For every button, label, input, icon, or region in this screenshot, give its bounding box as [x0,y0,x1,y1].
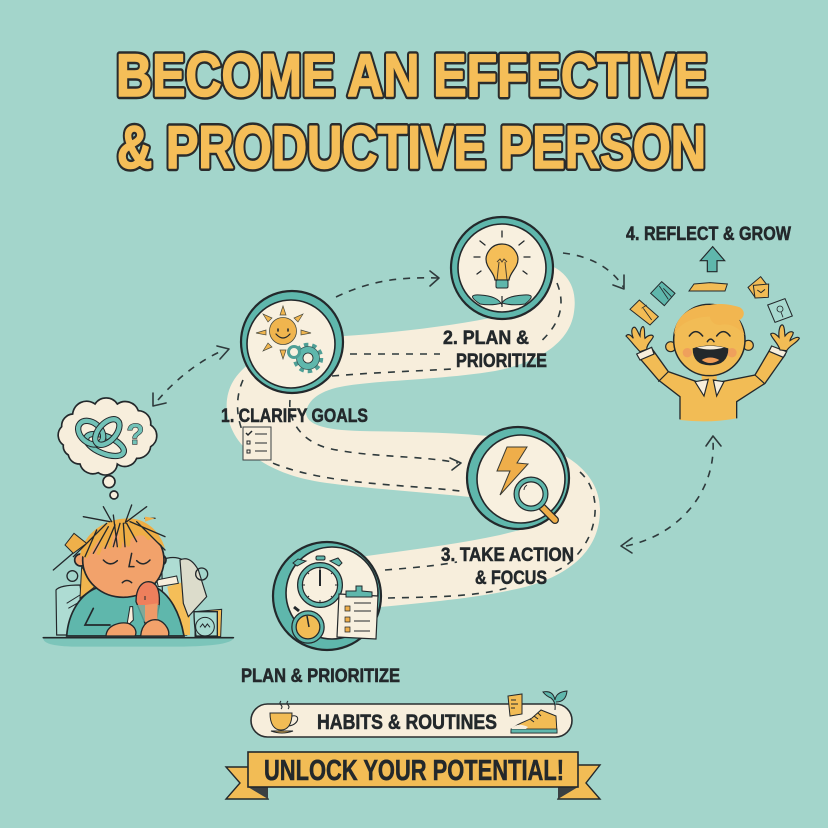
title: BECOME AN EFFECTIVE [116,42,708,109]
step 1 circle: clarify goals [241,291,343,393]
icon: tangled knot [74,415,127,461]
winding path ribbon [227,262,600,608]
icon: up arrow [700,247,725,272]
cuffs [637,346,787,360]
icon: checklist [243,427,271,460]
icon: yellow box [630,300,658,325]
head [83,523,164,597]
icon: teal note [651,282,675,306]
label: step 4: 4. REFLECT & GROW [626,224,791,245]
icon: sprout leaves [472,295,531,307]
icon: lightning bolt [497,447,528,495]
collar [695,379,724,396]
cheeks [683,348,692,357]
title [116,42,708,181]
banner main band [248,752,578,787]
happy person [626,247,799,421]
step 3 circle: take action and focus [467,427,569,529]
habits and routines pill [251,691,572,737]
label: step 1: 1. CLARIFY GOALS [221,405,368,427]
label: plan and prioritize: PLAN & PRIORITIZE [241,666,400,687]
step 2 circle: plan and prioritize [451,217,553,319]
hair back [80,567,95,598]
icon: clipboard [337,586,378,639]
banner left tail [226,767,268,799]
label: step 2 [443,327,547,372]
hair [53,505,165,570]
clutter behind person [56,557,208,635]
label: step 2: PRIORITIZE [456,350,547,372]
pen [127,607,133,627]
banner: unlock your potential [226,752,600,799]
torso and arms [67,587,184,636]
desk shadow [43,638,233,647]
arrow: step 2 to step 4 [563,253,624,289]
title: & PRODUCTIVE PERSON [117,114,706,181]
icon: sun [256,306,311,359]
hair [674,304,744,335]
banner right tail [558,765,600,799]
dashed route lines on ribbon [238,283,595,598]
desk line [43,635,233,640]
title: & PRODUCTIVE PERSON [117,114,706,181]
left hand [626,327,653,352]
banner folds [248,787,578,799]
arrow: confusion to step 1 [153,346,229,406]
arrow: clarify goals into step 3 [450,458,461,470]
label: step 3: & FOCUS [475,567,547,589]
label: habits and routines: HABITS & ROUTINES [317,711,497,734]
arrow: step 4 to step 3 [621,436,721,553]
eyes and nose [689,332,730,342]
icon: note [508,694,522,716]
sweater fold lines [658,372,765,384]
face details [103,553,150,583]
right hand [771,325,799,351]
banner text: UNLOCK YOUR POTENTIAL! [264,755,564,787]
tired person at desk [43,505,233,647]
title: BECOME AN EFFECTIVE [116,42,708,109]
icon: gears [288,346,320,370]
neck [702,373,717,387]
hands [106,620,169,636]
mug [194,609,222,637]
ears [75,554,166,566]
icon: folder top [689,283,727,291]
ears [666,342,676,352]
head [674,304,745,376]
body and arms [638,347,785,421]
icon: sprout [543,691,567,710]
label: step 3 [441,544,574,589]
label: step 3: 3. TAKE ACTION [441,544,574,566]
icon: coffee cup [270,701,298,733]
step 4 circle: time and tasks [273,542,381,650]
icon: magnifier card [768,299,792,322]
label: step 2: 2. PLAN & [443,327,529,349]
chin hand and forearm [136,582,159,623]
icon: sneaker [511,710,557,733]
arrow: step 1 to step 2 [336,271,439,297]
icon: stopwatch [294,607,322,641]
icon: question mark: ? [127,419,144,451]
icon: light bulb [474,231,530,288]
thought bubble [58,398,157,499]
smile [693,345,728,365]
icon: alarm clock [293,556,342,605]
icon: magnifying glass [516,480,555,520]
icon: check sticky notes [748,277,769,298]
